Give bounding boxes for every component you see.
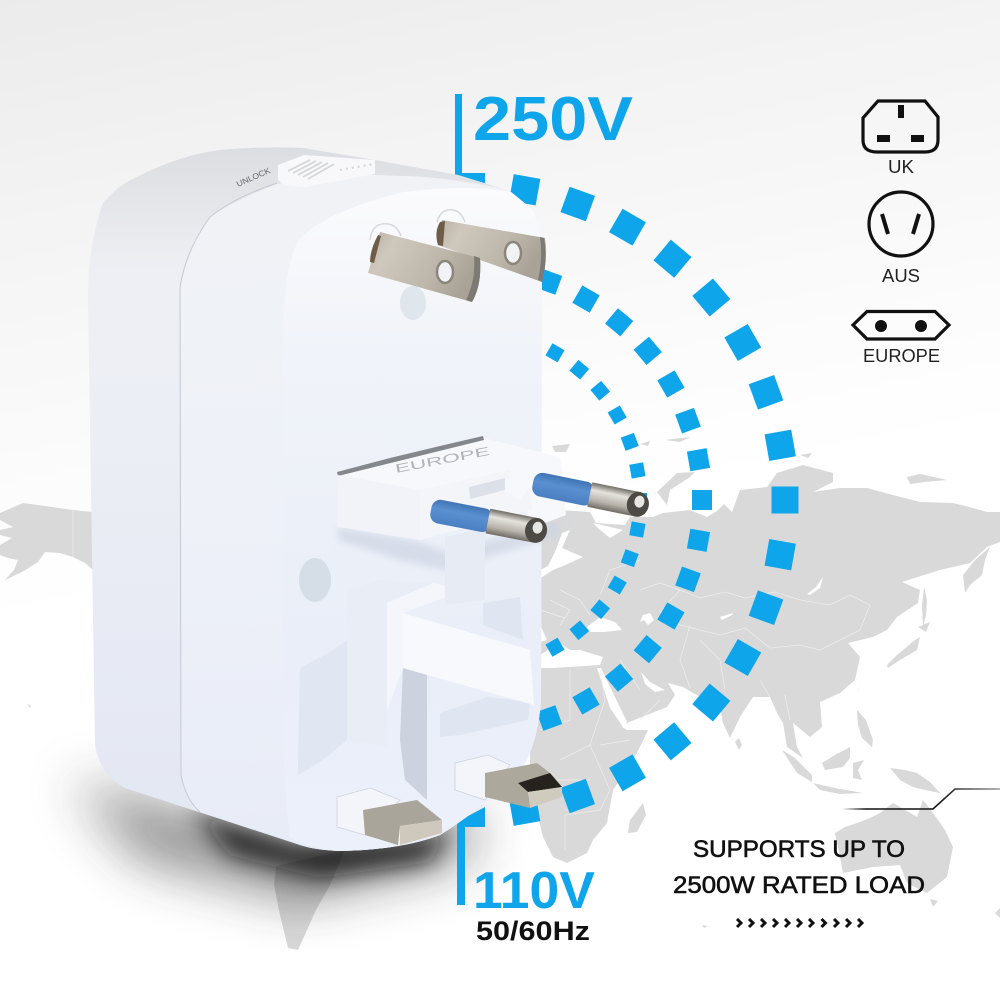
adapter: front body	[181, 175, 542, 851]
subheading: frequency: 50/60Hz	[476, 916, 590, 946]
adapter: europe plug shadow	[338, 520, 560, 570]
adapter: uk earth pillar	[347, 580, 465, 747]
adapter: us blade front	[368, 232, 480, 302]
map: south america tip	[274, 850, 345, 950]
adapter: uk pin left	[337, 788, 442, 845]
adapter: side mounting hole	[299, 558, 331, 602]
adapter: front face	[283, 188, 542, 851]
callout: rated load connector line	[842, 789, 1000, 809]
label: AUS: AUS	[882, 266, 920, 286]
adapter: europe pillar	[445, 528, 485, 605]
adapter: slot	[400, 668, 427, 800]
voltage arc: inner dotted ring	[545, 343, 647, 657]
adapter: uk recess right	[440, 597, 530, 737]
adapter: europe pin front	[429, 498, 549, 545]
adapter: unlock slider	[235, 155, 375, 189]
map: country borders	[73, 510, 870, 850]
bracket: 250V	[455, 94, 485, 190]
adapter: europe plug block	[337, 436, 566, 540]
map: islands	[28, 437, 1000, 928]
adapter: uk plug recess	[298, 640, 347, 775]
adapter: body seam	[180, 183, 277, 812]
heading: 250V: 250V	[473, 85, 633, 154]
adapter: unlock label: UNLOCK	[235, 166, 272, 189]
icon: uk socket	[863, 101, 938, 152]
world map	[0, 437, 1000, 950]
adapter: europe pin rear	[531, 471, 651, 519]
callout: supports up to 2500W: SUPPORTS UP TO	[693, 836, 905, 863]
drop shadow under adapter: core	[190, 810, 455, 878]
adapter: us blade rear	[436, 220, 546, 282]
map: eurasia and africa	[530, 465, 1000, 863]
label: EUROPE: EUROPE	[863, 346, 940, 366]
travel adapter	[88, 147, 651, 851]
icon: europe socket	[853, 312, 949, 339]
bracket: 110V	[457, 807, 485, 905]
adapter: top shading	[90, 147, 500, 290]
voltage arc: middle dotted ring	[537, 269, 712, 731]
drop shadow under adapter: wide haze	[70, 780, 480, 900]
adapter: upper recess hole	[400, 286, 426, 320]
heading: 110V: 110V	[473, 862, 595, 920]
callout: supports up to 2500W: 2500W RATED LOAD	[673, 872, 925, 899]
voltage arc: outer dotted ring	[509, 174, 798, 826]
map: inland seas	[530, 523, 823, 727]
adapter: blade socket rings	[370, 210, 465, 240]
adapter: europe label: EUROPE	[394, 444, 491, 476]
label: UK: UK	[888, 157, 914, 177]
icon: australia socket	[869, 192, 933, 256]
map: alaska and canada	[0, 503, 93, 580]
chevron row	[737, 919, 862, 927]
adapter: uk pin right	[455, 755, 562, 808]
adapter: rear body	[88, 147, 542, 851]
callout: supports up to 2500W	[673, 836, 925, 899]
adapter: uk earth bar	[403, 613, 534, 705]
